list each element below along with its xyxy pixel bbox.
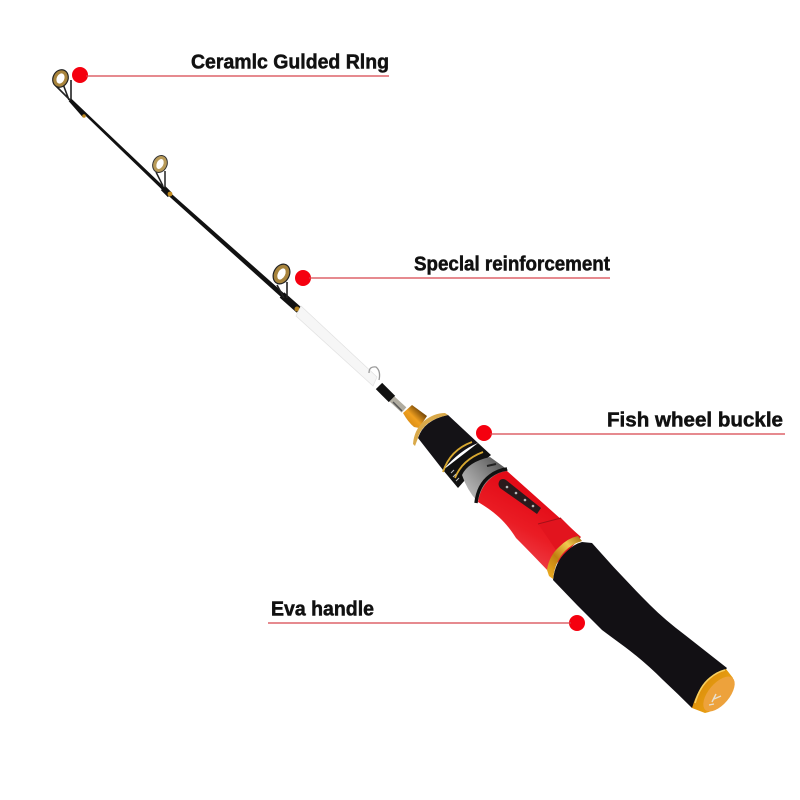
callout: fish wheel buckle: Fish wheel buckle	[607, 410, 783, 432]
gold cone	[403, 405, 427, 428]
white rod section	[296, 306, 377, 386]
lower foam handle	[553, 542, 727, 708]
callout: eva handle	[268, 598, 585, 631]
gold ring	[547, 536, 582, 579]
callout: fish wheel buckle	[476, 410, 785, 441]
gold end cap	[692, 669, 741, 717]
callout: special reinforcement: Speclal reinforcement	[414, 254, 610, 276]
callout: special reinforcement	[295, 254, 610, 286]
callout: ceramic guided ring	[72, 52, 389, 83]
fishing rod	[50, 67, 741, 717]
rod tip section	[69, 98, 300, 311]
ferrule	[379, 386, 404, 411]
callout: eva handle: Eva handle	[271, 598, 374, 620]
guide ring: middle	[150, 153, 170, 188]
guide ring: tip	[50, 67, 71, 100]
hook keeper	[369, 367, 380, 380]
upper foam grip	[413, 413, 491, 488]
red reel seat	[478, 471, 581, 572]
guide ring: lower	[270, 261, 293, 298]
callout: ceramic guided ring: Ceramlc Gulded Rlng	[191, 52, 389, 74]
silver reel seat ring	[462, 457, 508, 503]
